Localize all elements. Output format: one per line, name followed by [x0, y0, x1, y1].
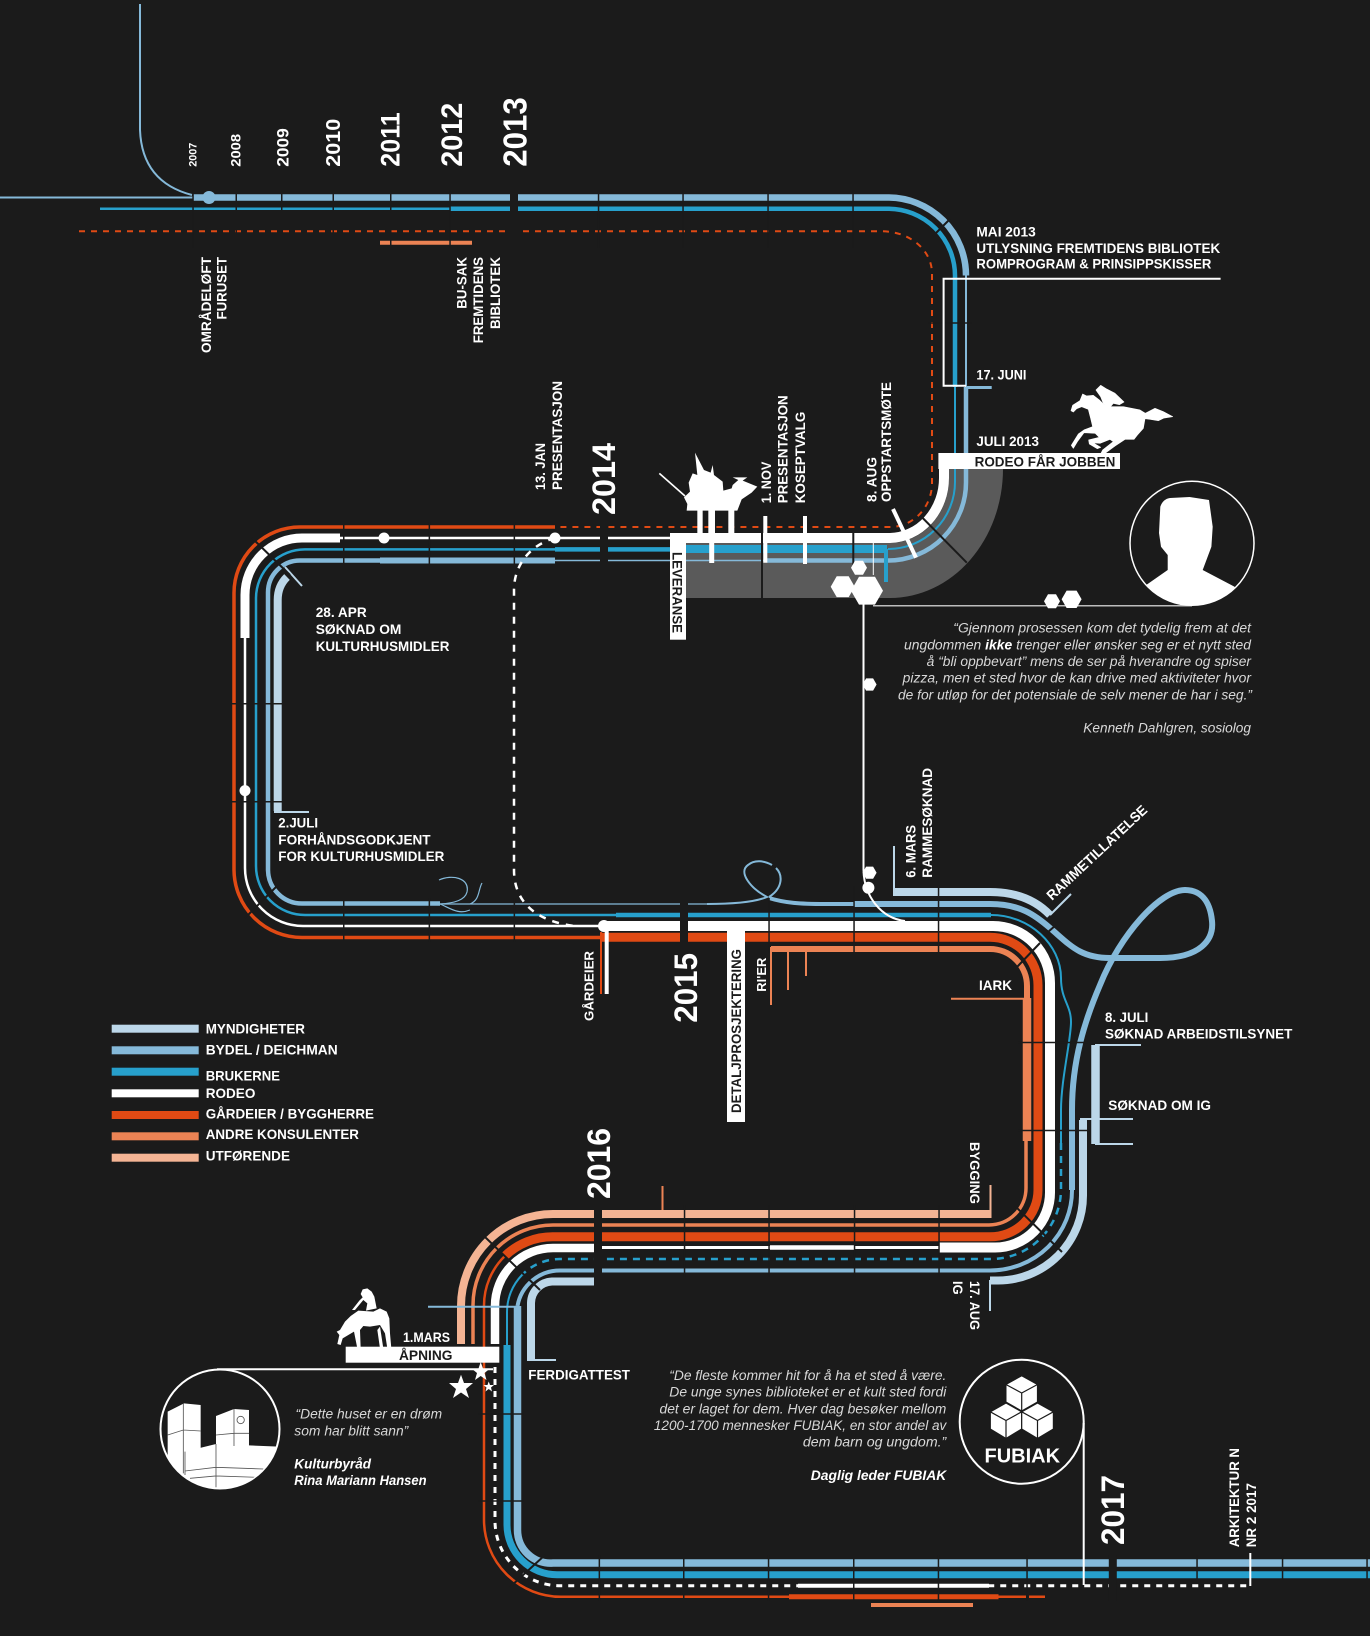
track: Myndigheter: [274, 388, 1141, 1360]
label: 6. mars rammesøknad: RAMMESØKNAD: [919, 768, 935, 878]
label: 8. aug oppstartsmøte: OPPSTARTSMØTE: [878, 382, 894, 502]
label: 28. apr søknad om kulturhusmidler: KULTURHUSMIDLER: [316, 638, 449, 654]
icon: three stacked cubes: [990, 1376, 1053, 1438]
years along the top track: 2013: [496, 97, 533, 167]
label: 17. aug IG: IG: [950, 1281, 966, 1295]
FUBIAK logo badge: FUBIAK: [984, 1445, 1061, 1467]
quote: Kulturbyråd: [294, 1406, 442, 1488]
years along the top track: 2010: [323, 119, 345, 167]
callout: Mai 2013 utlysning: UTLYSNING FREMTIDENS BIBLIOTEK: [976, 240, 1220, 256]
label: 1. mars åpning: ÅPNING: [399, 1347, 453, 1363]
callout: Mai 2013 utlysning: ROMPROGRAM & PRINSIPPSKISSER: [976, 256, 1211, 272]
quote: daglig leder FUBIAK: Daglig leder FUBIAK: [811, 1468, 948, 1483]
quote: Kenneth Dahlgren: de for utløp for det potensiale de selv mener de har i seg.”: [898, 687, 1253, 702]
label: Områdeløft Furuset: FURUSET: [214, 257, 230, 320]
icon: oil platform silhouette: [659, 453, 757, 533]
quote: Kenneth Dahlgren: å “bli oppbevart” mens de ser på hverandre og spiser: [927, 654, 1252, 669]
label: Bygging: BYGGING: [967, 1142, 983, 1204]
icon: galloping horse and rider: [1071, 385, 1173, 455]
label: 28. apr søknad om kulturhusmidler: 28. APR: [316, 604, 367, 620]
label: BU-sak Fremtidens bibliotek: [454, 257, 503, 343]
label: Områdeløft Furuset: OMRÅDELØFT: [198, 257, 214, 353]
label: Juli 2013 Rodeo får jobben: JULI 2013: [976, 433, 1039, 449]
quote: Kenneth Dahlgren: Kenneth Dahlgren, sosiolog: [1083, 721, 1251, 736]
legend item: Rodeo: RODEO: [206, 1085, 256, 1101]
connector from opening to building illustration: [217, 1368, 493, 1370]
quote: Kulturbyråd: Kulturbyråd: [294, 1456, 372, 1471]
track: Brukerne: [100, 209, 1370, 1575]
label: 2. juli forhåndsgodkjent: FORHÅNDSGODKJENT: [278, 831, 431, 847]
callout: Mai 2013 utlysning: [944, 224, 1221, 386]
label: Ferdigattest: FERDIGATTEST: [528, 1366, 630, 1382]
legend item: Bydel / Deichman: [112, 1042, 338, 1058]
track: Andre konsulenter: [380, 243, 1027, 1605]
years along the top track: 2009: [274, 128, 292, 167]
icon: portrait of Kenneth Dahlgren: [1129, 480, 1255, 606]
label: Arkitektur N nr 2 2017: [1226, 1448, 1259, 1586]
label: BU-sak Fremtidens bibliotek: BIBLIOTEK: [487, 257, 503, 329]
quote: Kenneth Dahlgren: “Gjennom prosessen kom det tydelig frem at det: [953, 621, 1252, 636]
label: 6. mars rammesøknad: [902, 768, 935, 878]
label: 17. aug IG: [950, 1281, 983, 1330]
label: Søknad om IG: SØKNAD OM IG: [1108, 1097, 1211, 1113]
FUBIAK logo badge: [960, 1360, 1084, 1484]
legend item: Gårdeier / Byggherre: GÅRDEIER / BYGGHERRE: [206, 1105, 374, 1121]
track: Utførende: [461, 1185, 991, 1344]
label: 8. aug oppstartsmøte: [864, 382, 894, 502]
quote: Kulturbyråd: som har blitt sann”: [294, 1424, 409, 1439]
label: 1. nov presentasjon konseptvalg: KOSEPTVALG: [792, 412, 808, 503]
label: 28. apr søknad om kulturhusmidler: [316, 604, 449, 654]
quote: Kulturbyråd: “Dette huset er en drøm: [296, 1406, 442, 1421]
station markers: [202, 191, 610, 932]
legend item: Brukerne: [112, 1067, 280, 1083]
legend item: Bydel / Deichman: BYDEL / DEICHMAN: [206, 1042, 338, 1058]
year: 2015: 2015: [668, 953, 704, 1023]
label: 2. juli forhåndsgodkjent: FOR KULTURHUSMIDLER: [278, 848, 444, 864]
label: 6. mars rammesøknad: 6. MARS: [902, 825, 918, 878]
label: BU-sak Fremtidens bibliotek: FREMTIDENS: [470, 257, 486, 343]
label: 1. nov presentasjon konseptvalg: 1. NOV: [758, 461, 774, 503]
label: 13. jan presentasjon: [532, 381, 565, 490]
milestone ticks across the Rodeo corner: [712, 509, 967, 575]
label: Arkitektur N nr 2 2017: ARKITEKTUR N: [1226, 1448, 1242, 1547]
quote: Kenneth Dahlgren: pizza, men et sted hvor de kan drive med aktiviteter hvor: [902, 671, 1252, 686]
quote: daglig leder FUBIAK: 1200-1700 mennesker FUBIAK, en stor andel av: [654, 1418, 948, 1433]
years along the top track: 2011: [376, 112, 406, 167]
label: 28. apr søknad om kulturhusmidler: SØKNAD OM: [316, 621, 401, 637]
legend item: Myndigheter: MYNDIGHETER: [206, 1020, 305, 1036]
label: 8. juli søknad arbeidstilsynet: 8. JULI: [1105, 1009, 1148, 1025]
label: 2. juli forhåndsgodkjent: [278, 815, 444, 864]
label: 13. jan presentasjon: PRESENTASJON: [549, 381, 565, 490]
quote: daglig leder FUBIAK: [654, 1368, 948, 1483]
legend item: Gårdeier / Byggherre: [112, 1105, 374, 1121]
legend item: Utførende: [112, 1148, 290, 1164]
label: 8. juli søknad arbeidstilsynet: SØKNAD ARBEIDSTILSYNET: [1105, 1026, 1293, 1042]
label: Rammetillatelse: RAMMETILLATELSE: [1043, 802, 1150, 903]
label: IARK: IARK: [979, 977, 1012, 993]
year: 2017: 2017: [1095, 1475, 1131, 1545]
label: 8. juli søknad arbeidstilsynet: [1105, 1009, 1293, 1042]
label: 1. mars åpning: 1.MARS: [403, 1329, 450, 1345]
label: Leveranse box: LEVERANSE: [670, 552, 686, 633]
label: Detaljprosjektering box: DETALJPROSJEKTERING: [728, 949, 744, 1113]
icon: opening stars: [449, 1362, 494, 1398]
callout: Mai 2013 utlysning: MAI 2013: [976, 224, 1036, 240]
quote: Kenneth Dahlgren: [898, 621, 1253, 736]
label: 2. juli forhåndsgodkjent: 2.JULI: [278, 815, 318, 831]
label: 1. nov presentasjon konseptvalg: PRESENTASJON: [775, 395, 791, 503]
label: 17. aug IG: 17. AUG: [967, 1281, 983, 1330]
year: 2014: 2014: [586, 443, 622, 515]
label: Arkitektur N nr 2 2017: NR 2 2017: [1243, 1483, 1259, 1547]
label: Områdeløft Furuset: [198, 257, 230, 353]
legend item: Brukerne: BRUKERNE: [206, 1067, 280, 1083]
connector with hexagons from corner to portrait and down to next stage: [831, 561, 1192, 921]
legend item: Andre konsulenter: [112, 1126, 359, 1142]
label: 17. juni: 17. JUNI: [976, 366, 1026, 382]
legend: [112, 1020, 374, 1164]
quote: Kulturbyråd: Rina Mariann Hansen: [294, 1473, 427, 1488]
years along the top track: 2012: [436, 103, 469, 167]
label: Juli 2013 Rodeo får jobben: [938, 433, 1120, 470]
quote: daglig leder FUBIAK: “De fleste kommer hit for å ha et sted å være.: [669, 1368, 946, 1383]
label: 13. jan presentasjon: 13. JAN: [532, 443, 548, 490]
legend item: Rodeo: [112, 1085, 256, 1101]
icon: library building in circle: [160, 1370, 280, 1493]
quote: Kenneth Dahlgren: ungdommen ikke trenger eller ønsker seg er et nytt sted: [904, 637, 1252, 652]
label: 1. mars åpning: [346, 1329, 499, 1363]
legend item: Andre konsulenter: ANDRE KONSULENTER: [206, 1126, 359, 1142]
grey highlight band at the Rodeo corner: [685, 469, 1003, 598]
label: BU-sak Fremtidens bibliotek: BU-SAK: [454, 257, 470, 309]
label: Juli 2013 Rodeo får jobben: RODEO FÅR JOBBEN: [975, 454, 1115, 470]
connector from FUBIAK badge to track: [1083, 1423, 1085, 1585]
quote: daglig leder FUBIAK: De unge synes biblioteket er et kult sted fordi: [669, 1385, 947, 1400]
years along the top track: [188, 97, 533, 167]
icon: horse and rider statue: [337, 1288, 391, 1348]
track: Rodeo: [245, 465, 1250, 1586]
label: Gårdeier: GÅRDEIER: [582, 950, 597, 1021]
years along the top track: 2008: [228, 133, 243, 167]
label: 8. aug oppstartsmøte: 8. AUG: [864, 457, 880, 502]
year: 2016: 2016: [581, 1128, 617, 1199]
time-period gaps cutting across the tracks: [192, 190, 1368, 1601]
legend item: Utførende: UTFØRENDE: [206, 1148, 290, 1164]
track: Gårdeier / Byggherre: [79, 231, 1045, 1597]
label: 1. nov presentasjon konseptvalg: [758, 395, 808, 503]
quote: daglig leder FUBIAK: dem barn og ungdom.”: [803, 1435, 947, 1450]
label: RI'er: RI'ER: [754, 957, 769, 992]
legend item: Myndigheter: [112, 1020, 305, 1036]
quote: daglig leder FUBIAK: det er laget for dem. Hver dag besøker mellom: [660, 1401, 946, 1416]
years along the top track: 2007: [188, 143, 200, 167]
